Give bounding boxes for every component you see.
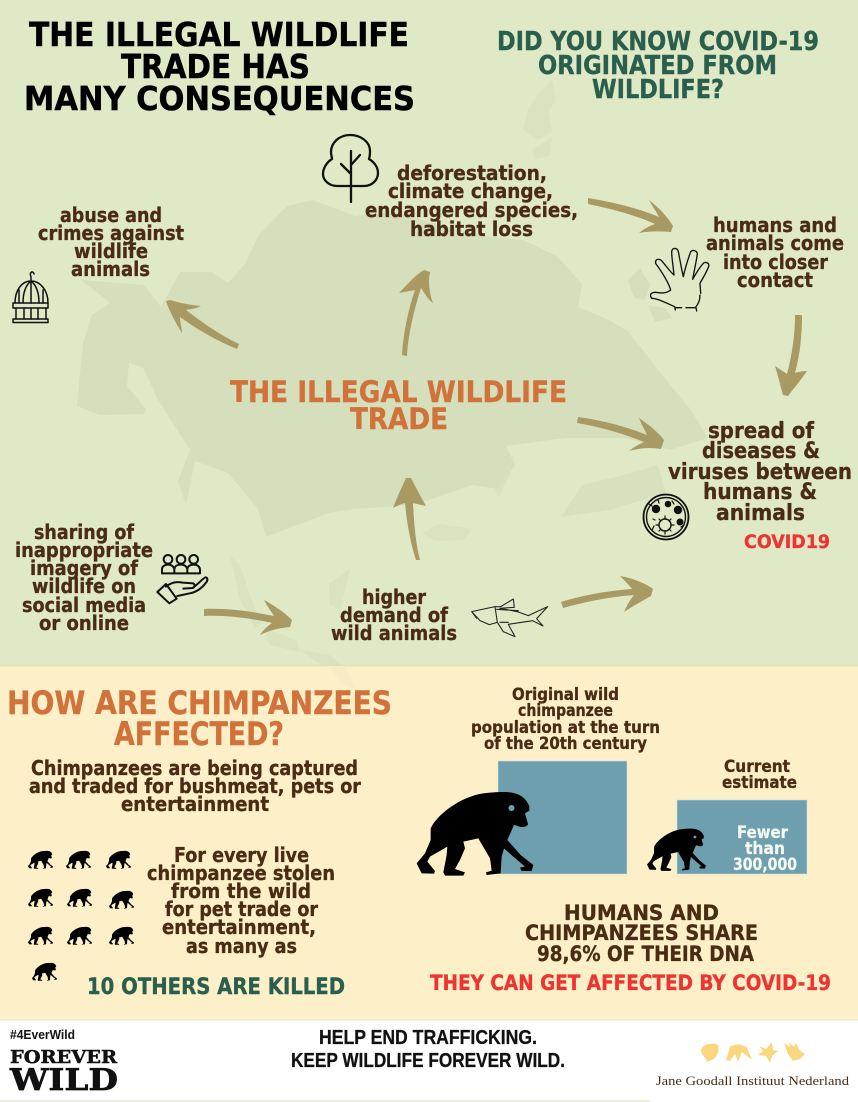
icon: hand [651,248,709,311]
text: deforestation: deforestation, [397,161,547,185]
label: original population: Original wild [512,685,619,705]
icon: tree [323,135,378,202]
panel: white footer background [0,1020,858,1102]
footer logo icons: Jane Goodall Institute [701,1042,805,1063]
text: abuse and crimes: crimes against [38,221,184,245]
bar chart: chimpanzee population [498,761,807,874]
label: fewer than 300,000 [733,823,797,875]
heading: did you know: WILDLIFE? [592,75,724,105]
central label: the illegal wildlife trade: THE ILLEGAL WILDLIFE [230,375,567,409]
text: for every live chimpanzee: For every live [174,843,309,867]
text: deforestation [365,161,578,241]
panel: green background [0,0,858,666]
arrow: sharing to demand [204,600,292,635]
text: humans and chimpanzees share DNA: 98,6% OF THEIR DNA [537,942,755,966]
arrow: trade to spread [577,417,664,451]
text: for every live chimpanzee: for pet trade or [165,897,318,921]
label: original population [471,685,660,754]
bar: original population [498,761,627,874]
text: chimpanzees captured: and traded for bushmeat, pets or [29,774,361,798]
text: sharing of imagery: inappropriate [15,538,153,562]
text: humans and chimpanzees share DNA: HUMANS AND [564,901,719,925]
footer slogan: KEEP WILDLIFE FOREVER WILD. [291,1050,565,1072]
text: higher demand [331,585,457,645]
text: chimpanzees captured: entertainment [121,792,269,816]
label: current estimate: Current [724,757,790,777]
arrow: trade to abuse [166,300,239,349]
text: humans and chimpanzees share DNA: CHIMPANZEES SHARE [525,921,758,945]
text: humans and animals come into closer contact: into closer [723,250,828,274]
footer logo: forever wild: FOREVER [10,1047,118,1068]
label: fewer than 300,000: than [745,839,785,859]
background map of Asia [77,80,708,690]
text: abuse and crimes: wildlife [74,239,148,263]
text: spread of diseases: animals [716,501,805,526]
heading: how are chimpanzees affected [7,684,392,753]
footer logo: forever wild: WILD [9,1063,118,1098]
title: THE ILLEGAL WILDLIFE [29,15,409,54]
label: original population: of the 20th century [484,734,647,754]
text: for every live chimpanzee: as many as [186,934,297,958]
label: fewer than 300,000: Fewer [737,823,789,843]
icon: bird cage [13,272,48,322]
text: chimpanzees captured [29,756,361,816]
icon: shark [472,599,548,637]
text: deforestation: endangered species, [365,198,578,222]
text: sharing of imagery: wildlife on [32,574,136,598]
label: original population: chimpanzee [518,701,613,721]
heading: how are chimpanzees affected: AFFECTED? [114,715,284,753]
text: humans and animals come into closer contact: humans and [713,213,837,237]
text: abuse and crimes: animals [71,257,150,281]
icon: people and hand [157,555,207,603]
title: TRADE HAS [121,47,310,86]
text: abuse and crimes [38,203,184,281]
text: for every live chimpanzee: from the wild [171,879,311,903]
central label: the illegal wildlife trade [230,375,567,436]
text: humans and animals come into closer contact [706,213,844,292]
arrow: demand to spread [561,576,653,612]
icon: small chimpanzee [647,829,706,871]
icon: large chimpanzee [417,792,533,876]
title: MANY CONSEQUENCES [24,79,415,118]
text: deforestation: climate change, [388,179,553,203]
label: current estimate [722,757,797,793]
text: for every live chimpanzee: entertainment, [162,915,316,939]
footer slogan: HELP END TRAFFICKING. [319,1027,537,1049]
title [24,15,415,118]
text: humans and animals come into closer contact: contact [737,268,813,292]
arrow: contact to spread [775,315,807,396]
central label: the illegal wildlife trade: TRADE [350,402,448,436]
bar: current estimate [677,800,807,874]
heading: did you know [497,27,819,105]
footer text: Jane Goodall Instituut Nederland: Jane Goodall Instituut Nederland [656,1073,850,1088]
label: current estimate: estimate [722,773,797,793]
text: spread of diseases [668,419,852,526]
text: for every live chimpanzee [147,843,335,958]
label: fewer than 300,000: 300,000 [733,855,797,875]
heading: how are chimpanzees affected: HOW ARE CHIMPANZEES [7,684,392,722]
arrow: deforestation to contact [588,198,673,233]
callout: 10 others are killed: 10 OTHERS ARE KILLED [87,975,345,1000]
label: original population: population at the turn [471,718,660,738]
text: deforestation: habitat loss [410,217,533,241]
heading: did you know: ORIGINATED FROM [538,51,777,81]
text: chimpanzees captured: Chimpanzees are being captured [31,756,358,780]
text: abuse and crimes: abuse and [60,203,162,227]
text: sharing of imagery: social media [22,593,146,617]
footer logo: forever wild [9,1027,118,1098]
text: higher demand: demand of [340,603,448,627]
text: sharing of imagery [15,520,153,635]
text: higher demand: higher [362,585,426,609]
text: higher demand: wild animals [331,621,457,645]
text: spread of diseases: humans & [703,480,817,505]
arrow: trade to deforestation [399,270,433,356]
arrow: demand to trade [393,478,426,560]
label: COVID19: COVID19 [744,531,830,553]
text: spread of diseases: diseases & [702,439,820,464]
footer slogan [291,1027,565,1072]
text: for every live chimpanzee: chimpanzee stolen [147,861,335,885]
icon group: ten chimpanzees [28,851,134,981]
footer logo: forever wild: #4EverWild [10,1027,75,1042]
text: sharing of imagery: imagery of [30,556,138,580]
text: sharing of imagery: or online [39,611,129,635]
panel: cream chimpanzee section background [0,666,858,1020]
text: humans and animals come into closer contact: animals come [706,231,844,255]
text: spread of diseases: spread of [708,419,814,444]
text: sharing of imagery: sharing of [34,520,134,544]
icon: virus petri dish [644,494,688,540]
text: humans and chimpanzees share DNA [525,901,758,966]
